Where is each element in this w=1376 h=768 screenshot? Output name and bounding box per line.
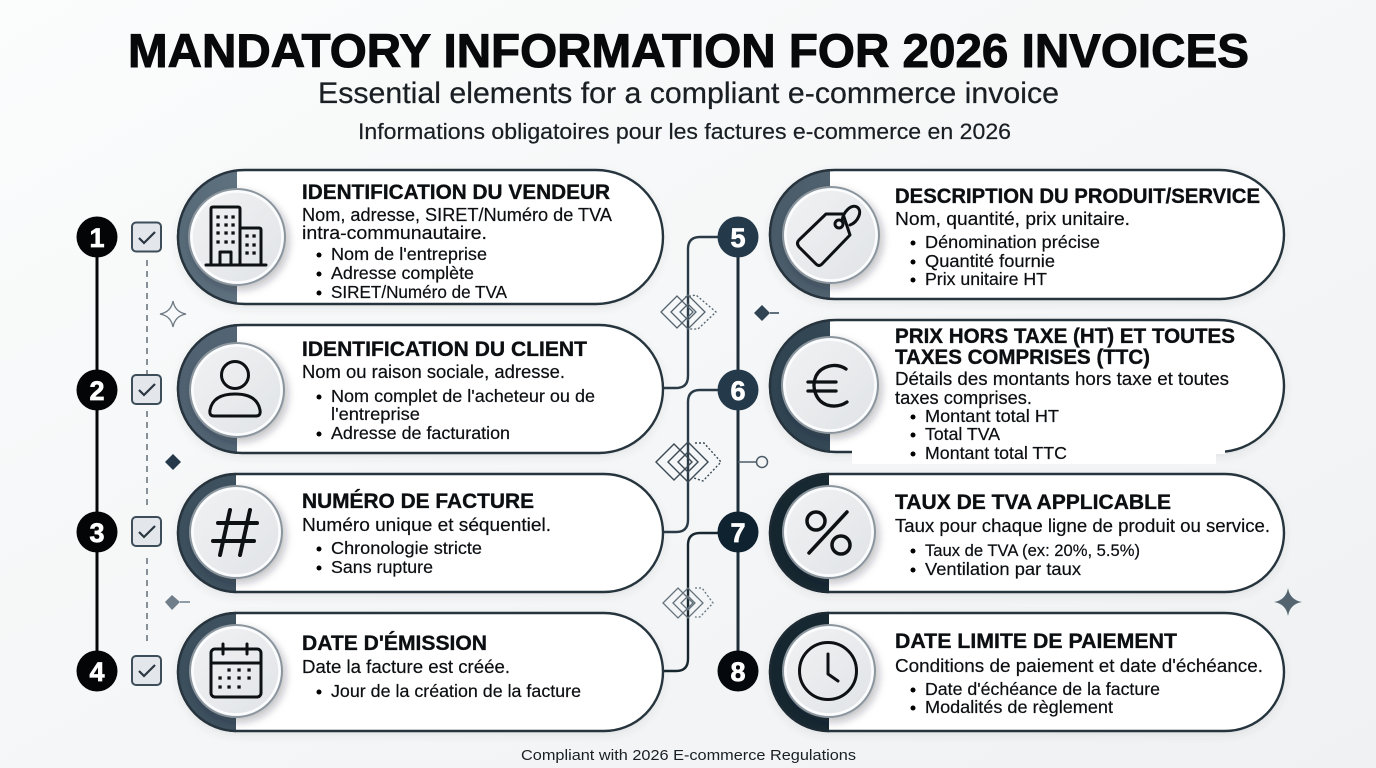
step 3 badge: 3 [89, 518, 105, 548]
panel text: seller identification: Nom de l'entreprise [331, 244, 487, 264]
panel text: payment due date: DATE LIMITE DE PAIEMENT [895, 630, 1177, 653]
panel text: seller identification [302, 181, 612, 302]
icon: calendar [211, 644, 261, 697]
panel text: product description [895, 185, 1260, 289]
panel text: prices excl. and incl. tax: Total TVA [925, 424, 1000, 444]
icon: percent [807, 512, 850, 554]
panel: applicable VAT rate [770, 474, 1284, 592]
panel text: seller identification: SIRET/Numéro de TVA [331, 282, 507, 302]
panel text: invoice number: Numéro unique et séquentiel. [302, 515, 551, 535]
icon: price tag [798, 206, 860, 266]
dark diamond with tail [754, 305, 779, 321]
step 8 badge [718, 650, 758, 692]
icon: euro [808, 365, 847, 406]
panel text: product description: Nom, quantité, prix unitaire. [895, 209, 1130, 229]
checkbox 2 [132, 375, 161, 404]
panel text: prices excl. and incl. tax [895, 325, 1235, 463]
panel: prices excl. and incl. tax [770, 320, 1284, 464]
panel: seller identification [178, 170, 663, 304]
step 1 badge: 1 [89, 223, 105, 253]
panel text: prices excl. and incl. tax: taxes comprises. [895, 388, 1032, 408]
panel text: invoice number: Sans rupture [331, 557, 433, 577]
panel text: seller identification: IDENTIFICATION DU VENDEUR [302, 181, 610, 204]
panel text: client identification [302, 338, 595, 443]
icon: hash [213, 510, 257, 555]
panel text: applicable VAT rate: Taux de TVA (ex: 20%, 5.5%) [925, 541, 1140, 560]
decorative diamond cluster middle [656, 442, 721, 482]
panel: issue date [178, 613, 663, 731]
panel: client identification [178, 325, 663, 453]
title: MANDATORY INFORMATION FOR 2026 INVOICES [128, 25, 1249, 78]
grey sparkle right [1274, 588, 1302, 616]
panel text: payment due date: Modalités de règlement [925, 697, 1113, 717]
panel text: issue date: Date la facture est créée. [302, 657, 510, 677]
decorative diamond cluster lower [663, 588, 713, 618]
checkbox 1 [132, 222, 161, 252]
panel text: issue date: Jour de la création de la facture [331, 681, 581, 701]
panel text: prices excl. and incl. tax: PRIX HORS TAXE (HT) ET TOUTES [895, 325, 1235, 348]
panel text: product description: Dénomination précise [925, 232, 1100, 252]
step 7 badge [718, 512, 758, 552]
sparkle outline [160, 301, 186, 327]
checkbox 4 [132, 656, 161, 685]
icon: person [210, 362, 260, 416]
checkbox 3 [132, 517, 161, 546]
panel text: payment due date [895, 630, 1263, 717]
step 6 badge [718, 370, 758, 410]
panel text: invoice number: NUMÉRO DE FACTURE [302, 490, 534, 513]
panel text: product description: Prix unitaire HT [925, 269, 1047, 289]
panel text: client identification: Adresse de facturation [331, 423, 510, 443]
panel text: client identification: IDENTIFICATION DU CLIENT [302, 338, 587, 361]
panel text: prices excl. and incl. tax: Détails des montants hors taxe et toutes [895, 369, 1229, 389]
step 8 badge: 8 [730, 657, 746, 687]
panel text: client identification: Nom ou raison sociale, adresse. [302, 362, 565, 382]
panel text: seller identification: intra-communautaire. [302, 223, 487, 243]
panel text: seller identification: Nom, adresse, SIRET/Numéro de TVA [302, 205, 612, 225]
small dark diamond [165, 454, 181, 470]
panel text: invoice number: Chronologie stricte [331, 538, 482, 558]
step 1 badge [76, 216, 118, 258]
panel: invoice number [178, 474, 663, 592]
step 5 badge: 5 [730, 223, 746, 253]
step 5 badge [718, 216, 758, 258]
panel text: payment due date: Conditions de paiement et date d'échéance. [895, 656, 1263, 676]
panel text: prices excl. and incl. tax: TAXES COMPRISES (TTC) [895, 346, 1150, 369]
decorative diamond cluster upper [661, 295, 716, 329]
panel text: product description: DESCRIPTION DU PRODUIT/SERVICE [895, 185, 1260, 208]
step 6 badge: 6 [730, 376, 746, 406]
panel text: applicable VAT rate [895, 491, 1270, 579]
icon: building [206, 207, 266, 265]
panel text: applicable VAT rate: TAUX DE TVA APPLICABLE [895, 491, 1171, 514]
footer note: Compliant with 2026 E-commerce Regulations [521, 747, 856, 764]
step 4 badge [76, 650, 118, 692]
panel text: product description: Quantité fournie [925, 251, 1055, 271]
panel text: prices excl. and incl. tax: Montant total HT [925, 406, 1059, 426]
panel text: invoice number [302, 490, 551, 577]
panel text: seller identification: Adresse complète [331, 263, 474, 283]
subtitle: French: Informations obligatoires pour les factures e-commerce en 2026 [358, 119, 1011, 144]
step 2 badge: 2 [89, 376, 105, 406]
panel text: issue date [302, 632, 581, 701]
subtitle: English: Essential elements for a compliant e-commerce invoice [318, 77, 1059, 110]
icon: clock [800, 642, 856, 700]
step 4 badge: 4 [89, 657, 105, 687]
panel: product description [770, 170, 1284, 299]
right timeline: numbered steps 5 to 8 [718, 216, 768, 692]
panel text: applicable VAT rate: Ventilation par taux [925, 559, 1081, 579]
grey diamond with tail [165, 595, 190, 610]
panel text: payment due date: Date d'échéance de la facture [925, 679, 1160, 699]
panel text: client identification: l'entreprise [331, 404, 420, 424]
left timeline: numbered steps 1 to 4 with checkboxes [76, 216, 161, 692]
connectors between left cards and right steps [663, 237, 718, 671]
panel text: prices excl. and incl. tax: Montant total TTC [925, 443, 1067, 463]
step 2 badge [76, 370, 118, 410]
step 7 badge: 7 [730, 518, 746, 548]
step 3 badge [76, 512, 118, 552]
panel text: client identification: Nom complet de l'acheteur ou de [331, 386, 595, 406]
panel text: issue date: DATE D'ÉMISSION [302, 632, 487, 655]
panel: payment due date [770, 613, 1284, 731]
panel text: applicable VAT rate: Taux pour chaque ligne de produit ou service. [895, 516, 1270, 536]
